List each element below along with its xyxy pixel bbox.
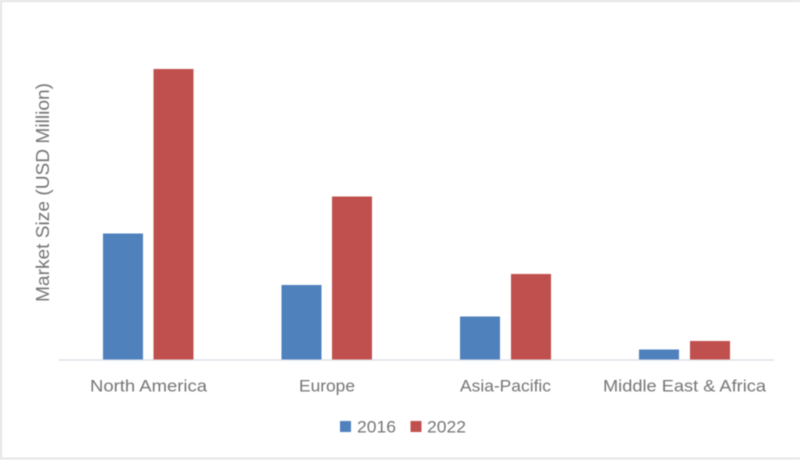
category label: Europe: Europe <box>299 378 355 396</box>
category label: Middle East & Africa: Middle East & Africa <box>603 378 767 396</box>
bars: North America <box>103 69 194 360</box>
legend entry: 2016: 2016 <box>357 418 396 436</box>
category label: North America: North America <box>90 378 208 396</box>
y-axis title: Market Size (USD Million) <box>33 83 53 302</box>
legend <box>340 418 466 436</box>
bars: Asia-Pacific <box>460 274 551 360</box>
bars: Middle East & Africa <box>639 341 730 360</box>
legend entry: 2022: 2022 <box>427 418 466 436</box>
bars: Europe <box>282 196 372 360</box>
category label: Asia-Pacific: Asia-Pacific <box>460 378 551 396</box>
x-axis line <box>59 359 774 361</box>
